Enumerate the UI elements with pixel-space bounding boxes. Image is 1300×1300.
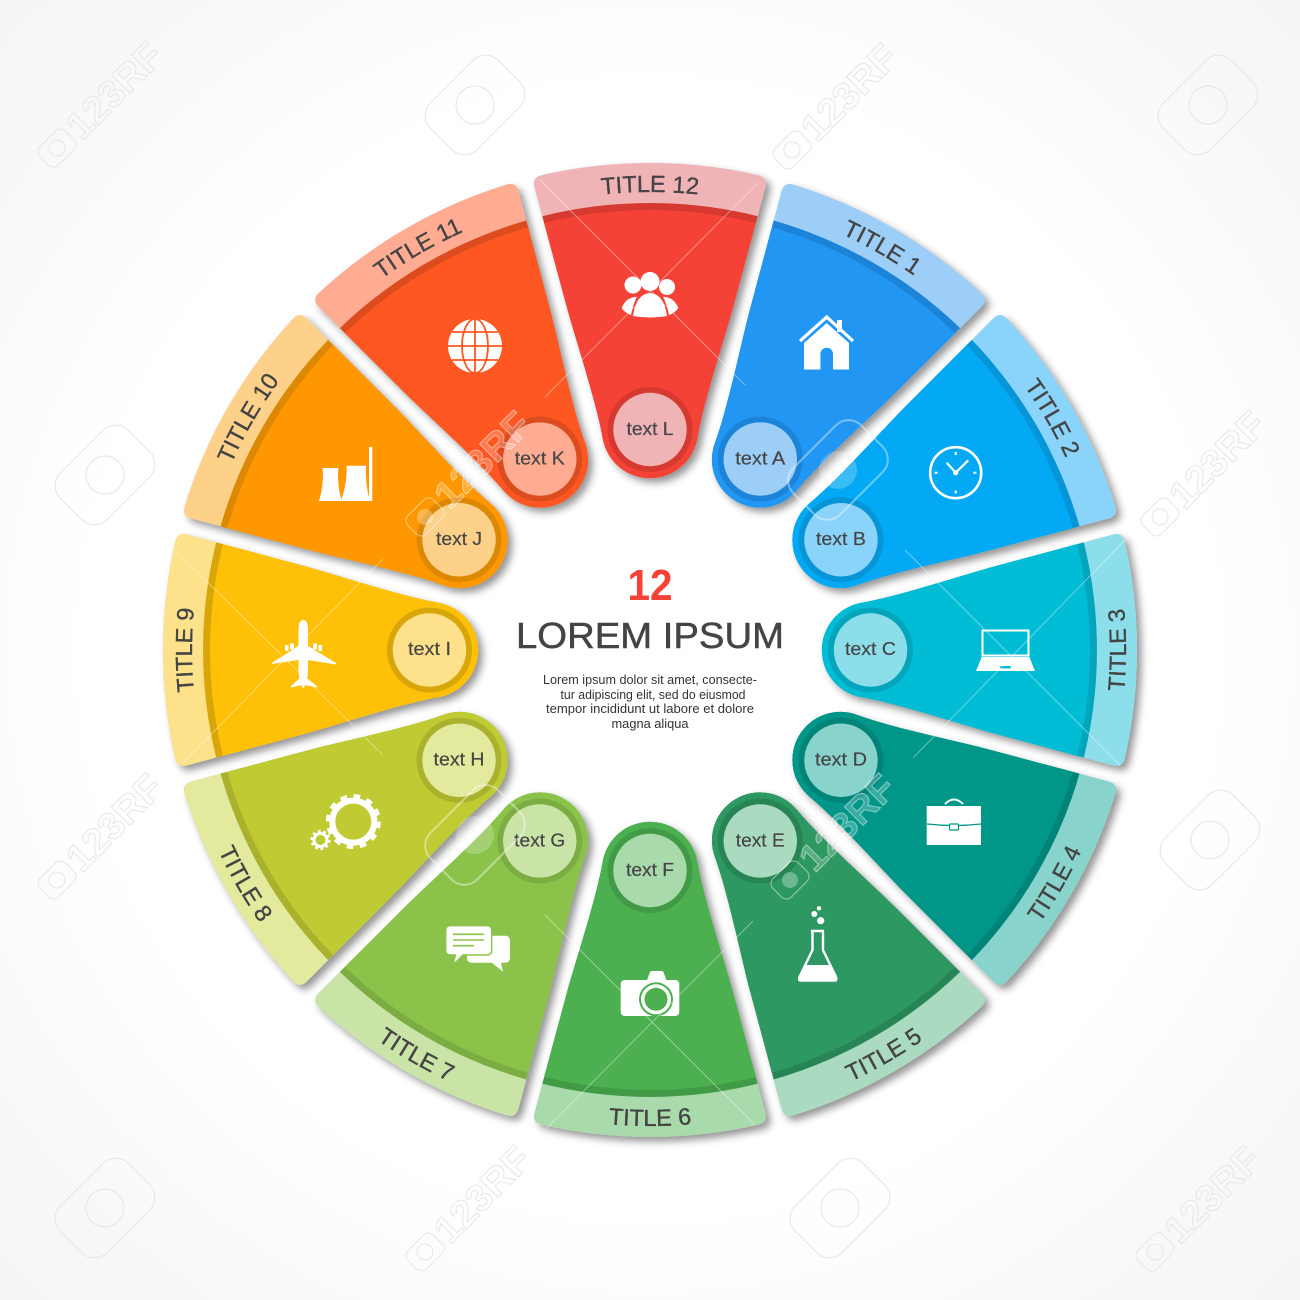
panel: segment 2 — [792, 315, 1116, 588]
watermarks on background: 123RF — [1161, 404, 1275, 517]
panel: segment 5 — [712, 792, 985, 1116]
center paragraph — [543, 673, 757, 731]
panel: segment 6 — [534, 822, 766, 1137]
icon: chat bubbles — [446, 926, 510, 972]
panel: segment 9 — [163, 534, 478, 766]
icon: flask — [798, 906, 837, 982]
watermarks and guide lines over chart — [177, 180, 1125, 1130]
icon: briefcase — [927, 800, 981, 845]
panel: segment 1 — [712, 184, 985, 508]
title 9: TITLE 9 — [176, 608, 194, 692]
label: text E: text E — [736, 830, 785, 850]
panel: segment 8 — [184, 712, 508, 985]
panel: segment 4 — [792, 712, 1116, 985]
panel: segment 10 — [184, 315, 508, 588]
label: text K: text K — [515, 448, 565, 468]
title 8: TITLE 8 — [220, 844, 272, 921]
label: text F: text F — [626, 860, 674, 880]
center heading: LOREM IPSUM — [516, 615, 784, 656]
icon: camera — [621, 971, 679, 1016]
title 5: TITLE 5 — [844, 1028, 921, 1080]
center paragraph: tempor incididunt ut labore et dolore — [546, 702, 754, 716]
watermarks on background: 123RF — [1156, 1139, 1270, 1252]
icon: power plant — [319, 447, 372, 501]
label: text A: text A — [735, 448, 785, 468]
label: text B: text B — [816, 529, 866, 549]
panel: segment 3 — [822, 534, 1137, 766]
title 12: TITLE 12 — [600, 176, 698, 194]
title 4: TITLE 4 — [1026, 846, 1080, 918]
watermarks on background: 123RF — [58, 767, 172, 880]
watermarks and guide lines over chart: 123RF — [791, 767, 905, 880]
icon: gears — [312, 797, 378, 849]
icon: clock — [930, 447, 981, 498]
icon: airplane — [272, 620, 336, 688]
icon: house — [800, 317, 853, 370]
watermarks on background: 123RF — [426, 1139, 540, 1252]
center number: 12 — [628, 561, 672, 610]
label: text J: text J — [436, 529, 482, 549]
icon: people — [622, 272, 678, 318]
label: text H: text H — [434, 750, 485, 770]
panel: segment 11 — [315, 184, 588, 508]
icon: globe — [448, 319, 502, 373]
panel: segment 7 — [315, 792, 588, 1116]
title 6: TITLE 6 — [610, 1108, 690, 1126]
label: text C: text C — [845, 639, 896, 659]
label: text G: text G — [514, 830, 565, 850]
icon: laptop — [976, 630, 1035, 671]
label: text D: text D — [815, 750, 867, 770]
title 3: TITLE 3 — [1108, 610, 1126, 690]
title 11: TITLE 11 — [372, 219, 462, 276]
center paragraph: Lorem ipsum dolor sit amet, consecte- — [543, 673, 757, 687]
segment drop shadows — [163, 163, 1137, 1137]
center paragraph: tur adipiscing elit, sed do eiusmod — [560, 688, 746, 702]
label: text L: text L — [626, 419, 674, 439]
title 2: TITLE 2 — [1028, 377, 1079, 458]
watermarks on background: 123RF — [793, 37, 907, 150]
title 1: TITLE 1 — [847, 219, 920, 276]
label: text I: text I — [408, 639, 451, 659]
panel: segment 12 — [534, 163, 766, 478]
title 10: TITLE 10 — [216, 374, 278, 459]
watermarks on background: 123RF — [58, 35, 172, 148]
watermarks and guide lines over chart: 123RF — [426, 404, 540, 517]
center paragraph: magna aliqua — [612, 717, 689, 731]
title 7: TITLE 7 — [382, 1026, 456, 1079]
